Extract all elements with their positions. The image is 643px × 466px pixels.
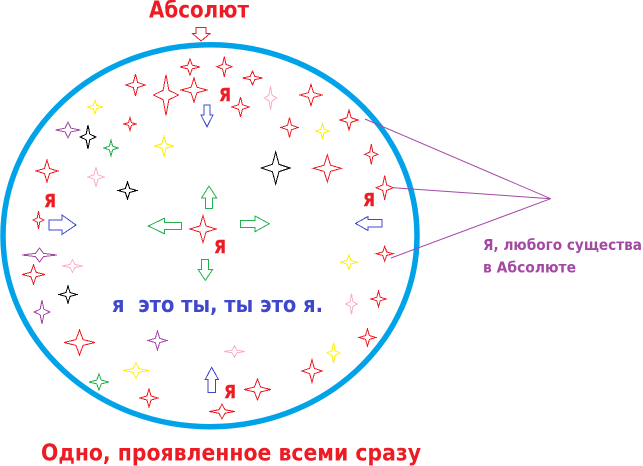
- labels: Я: Я: [224, 382, 236, 403]
- labels: Я: Я: [214, 237, 226, 258]
- labels: Я: Я: [363, 190, 375, 211]
- callout lines: [365, 119, 551, 258]
- circle: the Absolute: [3, 45, 417, 427]
- bottom caption: Одно, проявленное всеми сразу: [41, 440, 421, 466]
- icon: arrow from title down into circle: [192, 28, 210, 41]
- stars: red: [22, 57, 393, 419]
- stars: black: [59, 125, 290, 303]
- stars: green: [89, 140, 118, 390]
- central statement: я это ты, ты это я.: [112, 293, 323, 318]
- labels: Я: [44, 85, 375, 403]
- callout label: в Абсолюте: [483, 258, 576, 276]
- labels: Я: Я: [44, 191, 56, 212]
- arrows: green, outward from centre: [148, 186, 269, 280]
- stars: pink: [62, 86, 357, 357]
- callout label: [483, 236, 642, 276]
- labels: Я: Я: [219, 85, 231, 106]
- stars: purple: [22, 122, 167, 350]
- stars: yellow: [87, 100, 358, 378]
- arrows: blue, inward from circle: [49, 105, 382, 393]
